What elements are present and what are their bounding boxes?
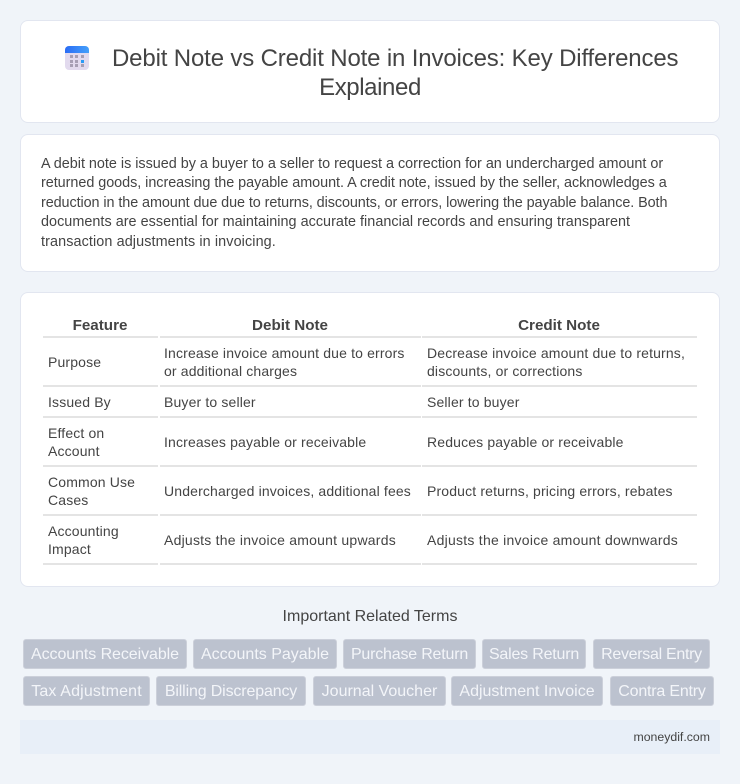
tag: Contra Entry bbox=[618, 683, 706, 700]
footer source: moneydif.com bbox=[633, 730, 710, 744]
title line 1: Debit Note vs Credit Note in Invoices: Key Differences bbox=[112, 45, 678, 72]
table header: Credit Note: Credit Note bbox=[518, 317, 600, 334]
paragraph line 3: reduction in the amount due due to returns, discounts, or errors, lowering the payable balance. Both bbox=[41, 195, 667, 211]
Effect credit note: Reduces payable or receivable bbox=[427, 434, 624, 450]
tag bbox=[482, 639, 586, 669]
tag: Accounts Receivable bbox=[31, 646, 179, 663]
tag bbox=[193, 639, 337, 669]
tag bbox=[610, 676, 714, 706]
related terms tags bbox=[23, 639, 714, 706]
Issued By credit note: Seller to buyer bbox=[427, 394, 520, 410]
tag bbox=[593, 639, 710, 669]
row: Common Use Cases: Common Use bbox=[48, 474, 135, 490]
row: Effect on Account: Effect on bbox=[48, 425, 104, 441]
tag: Sales Return bbox=[489, 646, 579, 663]
tag: Journal Voucher bbox=[322, 683, 437, 700]
Use cases debit note: Undercharged invoices, additional fees bbox=[164, 483, 411, 499]
tag: Adjustment Invoice bbox=[459, 683, 595, 700]
row: Purpose: Purpose bbox=[48, 354, 101, 370]
Purpose debit note bbox=[164, 345, 405, 379]
tag bbox=[156, 676, 306, 706]
paragraph line 4: documents are essential for maintaining accurate financial records and ensuring transparent bbox=[41, 214, 630, 230]
table header: Debit Note: Debit Note bbox=[252, 317, 328, 334]
row: Accounting Impact: Impact bbox=[48, 541, 91, 557]
row: Common Use Cases bbox=[48, 474, 135, 508]
tag bbox=[451, 676, 603, 706]
heading: related terms: Important Related Terms bbox=[283, 608, 457, 625]
table header: Feature: Feature bbox=[73, 317, 127, 334]
icon: calendar bbox=[65, 46, 89, 70]
row: Issued By: Issued By bbox=[48, 394, 111, 410]
tag bbox=[343, 639, 476, 669]
tag: Reversal Entry bbox=[601, 646, 702, 663]
tag: Purchase Return bbox=[351, 646, 468, 663]
panel: introduction bbox=[20, 134, 720, 272]
panel: header bbox=[20, 20, 720, 123]
paragraph line 1: A debit note is issued by a buyer to a seller to request a correction for an undercharged amount or bbox=[41, 156, 663, 172]
paragraph line 5: transaction adjustments in invoicing. bbox=[41, 234, 276, 250]
Impact credit note: Adjusts the invoice amount downwards bbox=[427, 532, 678, 548]
paragraph line 2: returned goods, increasing the payable amount. A credit note, issued by the seller, acknowledges a bbox=[41, 175, 667, 191]
row: Effect on Account: Account bbox=[48, 443, 100, 459]
tag bbox=[23, 676, 150, 706]
Effect debit note: Increases payable or receivable bbox=[164, 434, 366, 450]
panel: comparison table bbox=[20, 292, 720, 587]
Purpose debit note: or additional charges bbox=[164, 363, 297, 379]
row: Accounting Impact bbox=[48, 523, 119, 557]
title line 2: Explained bbox=[319, 74, 421, 101]
Purpose credit note: discounts, or corrections bbox=[427, 363, 582, 379]
Purpose credit note: Decrease invoice amount due to returns, bbox=[427, 345, 685, 361]
Purpose debit note: Increase invoice amount due to errors bbox=[164, 345, 405, 361]
tag: Accounts Payable bbox=[201, 646, 329, 663]
tag bbox=[23, 639, 187, 669]
row: Accounting Impact: Accounting bbox=[48, 523, 119, 539]
tag: Tax Adjustment bbox=[31, 683, 142, 700]
Issued By debit note: Buyer to seller bbox=[164, 394, 256, 410]
tag: Billing Discrepancy bbox=[165, 683, 297, 700]
Use cases credit note: Product returns, pricing errors, rebates bbox=[427, 483, 673, 499]
Purpose credit note bbox=[427, 345, 685, 379]
footer bar bbox=[20, 720, 720, 754]
row: Effect on Account bbox=[48, 425, 104, 459]
row: Common Use Cases: Cases bbox=[48, 492, 88, 508]
tag bbox=[313, 676, 446, 706]
Impact debit note: Adjusts the invoice amount upwards bbox=[164, 532, 396, 548]
